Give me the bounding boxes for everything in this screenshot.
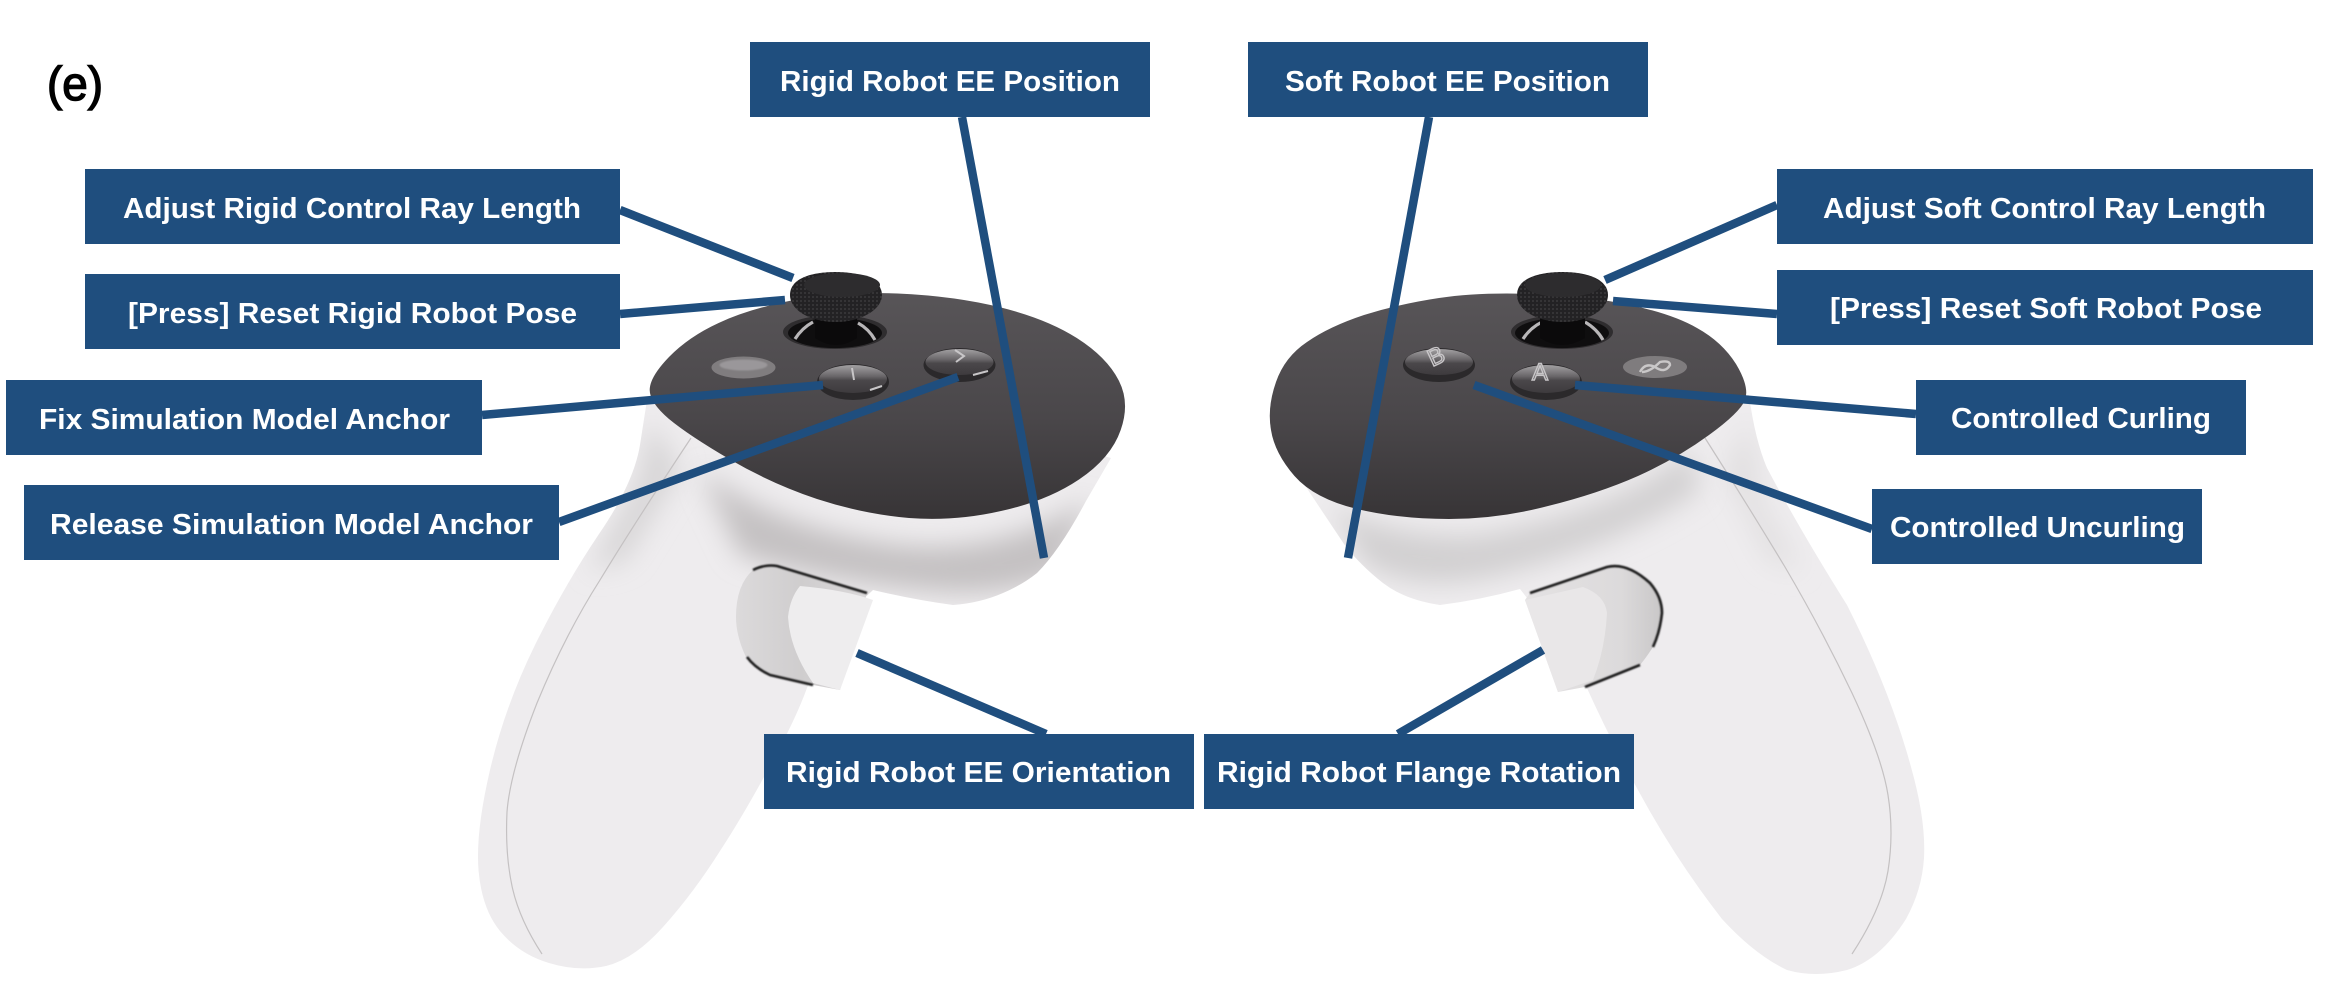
right button A bbox=[1510, 359, 1582, 400]
right controller body bbox=[1290, 395, 1924, 974]
arrow: adjust rigid ray length bbox=[620, 210, 793, 278]
right meta button bbox=[1623, 356, 1687, 378]
right faceplate bbox=[1270, 294, 1746, 519]
label: Fix Simulation Model Anchor: Fix Simulation Model Anchor bbox=[39, 404, 450, 436]
left body shading bbox=[590, 420, 1090, 593]
left button X bbox=[817, 364, 889, 400]
label: Adjust Rigid Control Ray Length bbox=[85, 169, 620, 244]
arrow: flange rotation bbox=[1398, 650, 1543, 734]
right button A: A bbox=[1532, 359, 1548, 386]
label: Adjust Soft Control Ray Length: Adjust Soft Control Ray Length bbox=[1823, 193, 2266, 225]
left controller body bbox=[478, 400, 1111, 968]
left faceplate bbox=[650, 293, 1125, 519]
arrow: rigid EE position bbox=[962, 117, 1044, 558]
trigger rear bbox=[1525, 566, 1662, 692]
label: Rigid Robot EE Position bbox=[750, 42, 1150, 117]
label: Controlled Uncurling: Controlled Uncurling bbox=[1890, 512, 2185, 544]
arrow: fix anchor bbox=[482, 385, 823, 415]
arrow: rigid EE orientation bbox=[857, 653, 1046, 734]
trigger tip bbox=[788, 586, 873, 690]
trigger rear bbox=[736, 566, 867, 690]
arrow: reset soft pose bbox=[1613, 301, 1777, 314]
arrow: controlled uncurling bbox=[1474, 385, 1872, 529]
right thumbstick well bbox=[1511, 315, 1613, 349]
label: Press Reset Soft Robot Pose bbox=[1777, 270, 2313, 345]
right grip seam bbox=[1705, 438, 1891, 954]
left button Y bbox=[924, 348, 996, 382]
right thumbstick bbox=[1517, 272, 1608, 345]
label: Controlled Curling bbox=[1916, 380, 2246, 455]
right button B: B bbox=[1423, 341, 1449, 372]
trigger slot shadow bbox=[1530, 566, 1662, 687]
label: Release Simulation Model Anchor bbox=[24, 485, 559, 560]
label: Press Reset Rigid Robot Pose: [Press] Reset Rigid Robot Pose bbox=[128, 298, 577, 330]
trigger slot shadow bbox=[747, 566, 867, 685]
left menu button bbox=[712, 356, 776, 378]
left trigger bbox=[736, 566, 873, 690]
label: Rigid Robot EE Orientation: Rigid Robot EE Orientation bbox=[786, 757, 1171, 789]
label: Rigid Robot EE Position: Rigid Robot EE Position bbox=[780, 66, 1120, 98]
label: Adjust Soft Control Ray Length bbox=[1777, 169, 2313, 244]
leader lines bbox=[482, 117, 1916, 734]
label: Soft Robot EE Position: Soft Robot EE Position bbox=[1285, 66, 1610, 98]
arrow: release anchor bbox=[559, 377, 958, 522]
arrow: reset rigid pose bbox=[620, 300, 785, 314]
panel label: (e): (e) bbox=[47, 57, 103, 110]
label: Rigid Robot Flange Rotation: Rigid Robot Flange Rotation bbox=[1217, 757, 1621, 789]
label: Fix Simulation Model Anchor bbox=[6, 380, 482, 455]
label: Rigid Robot EE Orientation bbox=[764, 734, 1194, 809]
left controller illustration bbox=[478, 272, 1125, 968]
arrow: adjust soft ray length bbox=[1605, 205, 1777, 280]
left grip seam bbox=[507, 438, 691, 954]
right controller illustration bbox=[1270, 272, 1924, 974]
label: Rigid Robot Flange Rotation bbox=[1204, 734, 1634, 809]
label: Adjust Rigid Control Ray Length: Adjust Rigid Control Ray Length bbox=[123, 193, 581, 225]
left thumbstick bbox=[790, 272, 882, 345]
right trigger bbox=[1525, 566, 1662, 692]
label: Controlled Curling: Controlled Curling bbox=[1951, 403, 2211, 435]
arrow: controlled curling bbox=[1575, 385, 1916, 414]
right body shading bbox=[1338, 452, 1777, 590]
label: Press Reset Soft Robot Pose: [Press] Reset Soft Robot Pose bbox=[1830, 293, 2262, 325]
label: Soft Robot EE Position bbox=[1248, 42, 1648, 117]
right button B bbox=[1403, 341, 1475, 382]
arrow: soft EE position bbox=[1348, 117, 1429, 558]
label: Controlled Uncurling bbox=[1872, 489, 2202, 564]
trigger tip bbox=[1525, 587, 1607, 692]
left thumbstick well bbox=[783, 315, 887, 349]
label: Release Simulation Model Anchor: Release Simulation Model Anchor bbox=[50, 509, 533, 541]
label: Press Reset Rigid Robot Pose bbox=[85, 274, 620, 349]
